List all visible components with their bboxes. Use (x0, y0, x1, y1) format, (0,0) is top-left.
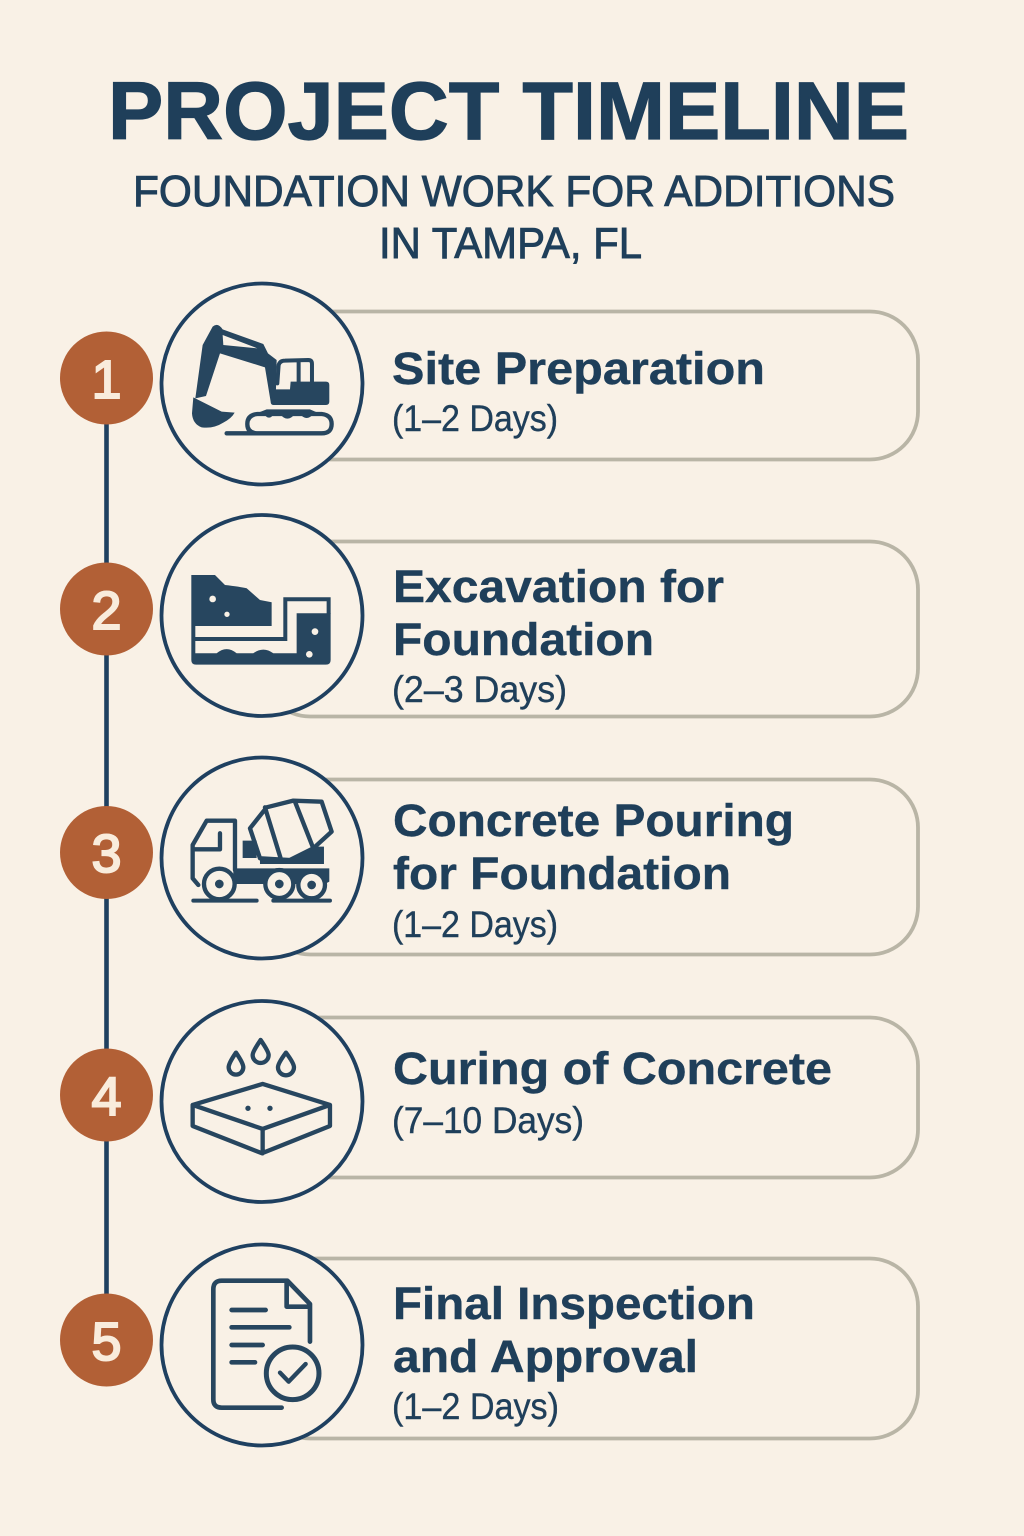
step 1 text: (1–2 Days) (392, 398, 558, 439)
number badge 3: 3 (91, 824, 122, 884)
step 4 text: (7–10 Days) (392, 1100, 584, 1141)
step 5 text: and Approval (393, 1331, 698, 1382)
number badge 2 (60, 562, 153, 656)
title: PROJECT TIMELINE (108, 66, 909, 157)
subtitle: IN TAMPA, FL (379, 219, 642, 268)
step 2 text: Excavation for (393, 561, 724, 612)
step 3 text: for Foundation (393, 848, 731, 899)
number badge 4 (60, 1048, 153, 1142)
subtitle (133, 167, 895, 268)
card: site preparation (262, 312, 918, 460)
step 4 text: Curing of Concrete (393, 1043, 832, 1094)
step 5 (60, 1244, 918, 1446)
card: final inspection (262, 1258, 918, 1438)
step 3 text: (1–2 Days) (392, 904, 558, 945)
step 2 text: Foundation (393, 614, 654, 665)
number badge 4: 4 (91, 1067, 122, 1127)
icon: concrete mixer truck (162, 758, 362, 958)
step 3 (60, 758, 918, 958)
step 1 text: Site Preparation (392, 343, 765, 394)
step 5 text: Final Inspection (393, 1278, 755, 1329)
step 2 text (392, 561, 724, 710)
number badge 1: 1 (91, 350, 122, 410)
number badge 3 (60, 806, 153, 899)
icon: excavation trench (162, 515, 362, 716)
number badge 1 (60, 332, 153, 424)
subtitle: FOUNDATION WORK FOR ADDITIONS (133, 167, 895, 216)
step 3 text (392, 795, 794, 945)
step 5 text (392, 1278, 755, 1427)
step 1 (60, 284, 918, 484)
icon: approved document (162, 1244, 362, 1446)
card: excavation (262, 542, 918, 716)
icon: curing slab with water drops (162, 1001, 362, 1202)
timeline connector line (104, 378, 109, 1340)
card: curing (262, 1018, 918, 1178)
step 1 text (392, 343, 765, 439)
card: concrete pouring (262, 780, 918, 954)
number badge 2: 2 (91, 581, 122, 641)
step 3 text: Concrete Pouring (393, 795, 794, 846)
step 2 text: (2–3 Days) (392, 669, 567, 710)
number badge 5 (60, 1294, 153, 1386)
step 5 text: (1–2 Days) (392, 1386, 559, 1427)
step 4 text (392, 1043, 832, 1141)
number badge 5: 5 (91, 1312, 122, 1372)
step 4 (60, 1001, 918, 1202)
step 2 (60, 515, 918, 716)
icon: excavator (162, 284, 362, 484)
